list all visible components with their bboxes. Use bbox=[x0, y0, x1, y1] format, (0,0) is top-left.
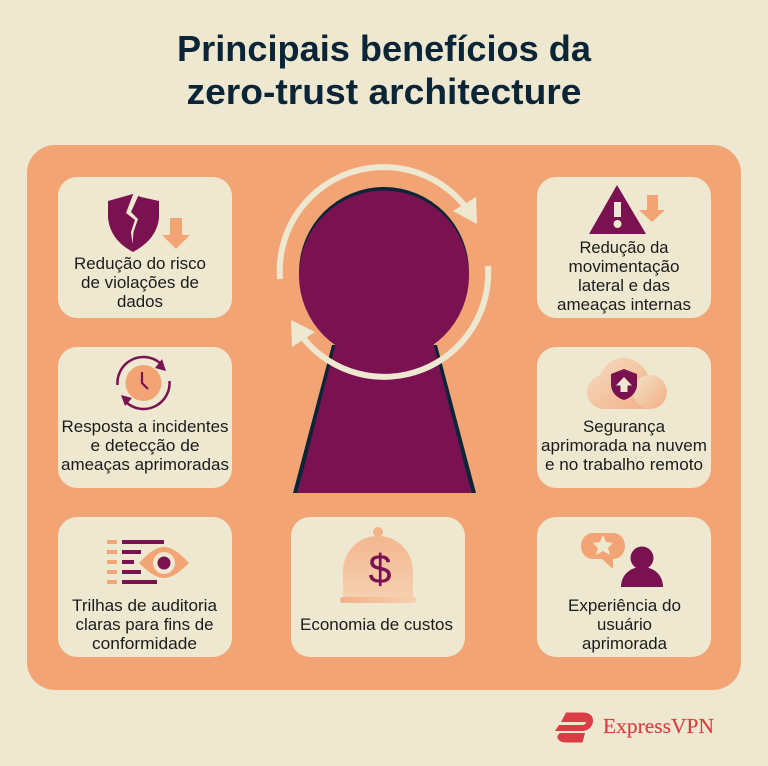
icon: warning triangle bbox=[589, 185, 646, 234]
ExpressVPN logo bbox=[555, 712, 714, 742]
icon: clock with arrows bbox=[117, 357, 170, 409]
card text: usuário bbox=[597, 616, 652, 634]
card text: aprimorada na nuvem bbox=[541, 437, 707, 455]
card text: Segurança bbox=[583, 418, 666, 436]
card text: Trilhas de auditoria bbox=[72, 597, 218, 615]
card: audit trails bbox=[58, 517, 232, 657]
icon: broken shield bbox=[108, 192, 159, 252]
card text bbox=[72, 597, 218, 653]
icon: eye with log lines bbox=[107, 540, 189, 584]
icon: down arrow bbox=[639, 195, 665, 222]
icon: cloud with shield bbox=[587, 358, 667, 409]
card: cloud security bbox=[537, 347, 711, 488]
card: data breach risk bbox=[58, 177, 232, 318]
card text: ameaças internas bbox=[557, 296, 691, 314]
card text: aprimorada bbox=[582, 635, 668, 653]
title: Principais benefícios da bbox=[177, 28, 592, 69]
panel: benefits bbox=[27, 145, 741, 690]
card text bbox=[557, 239, 691, 314]
card text: Redução do risco bbox=[74, 255, 206, 273]
card text: movimentação bbox=[568, 258, 680, 276]
card text: e no trabalho remoto bbox=[545, 456, 703, 474]
keyhole illustration bbox=[293, 187, 476, 493]
title: zero-trust architecture bbox=[186, 71, 582, 112]
title bbox=[177, 28, 592, 112]
icon: user with speech bubble bbox=[581, 533, 663, 587]
icon: down arrow bbox=[162, 218, 190, 249]
card text: conformidade bbox=[92, 635, 197, 653]
card text: de violações de bbox=[81, 274, 199, 292]
card text bbox=[541, 418, 707, 474]
card text: Experiência do bbox=[568, 597, 681, 615]
card text: dados bbox=[117, 293, 163, 311]
card text bbox=[61, 418, 229, 474]
card: user experience bbox=[537, 517, 711, 657]
circular arrows bbox=[280, 167, 488, 377]
card: cost savings bbox=[291, 517, 465, 657]
card text: Redução da bbox=[580, 239, 669, 257]
card text: Economia de custos bbox=[300, 616, 453, 634]
card text bbox=[568, 597, 681, 653]
card: incident response bbox=[58, 347, 232, 488]
card text: e detecção de bbox=[90, 437, 200, 455]
card text: claras para fins de bbox=[76, 616, 214, 634]
card text: lateral e das bbox=[578, 277, 670, 295]
logo wordmark: ExpressVPN bbox=[603, 714, 714, 738]
card: lateral movement bbox=[537, 177, 711, 318]
card text bbox=[74, 255, 206, 311]
icon: money bell bbox=[340, 527, 416, 603]
icon: money bell: $ bbox=[369, 546, 392, 592]
card text: ameaças aprimoradas bbox=[61, 456, 229, 474]
icon: logo mark bbox=[555, 712, 593, 742]
card text: Resposta a incidentes bbox=[62, 418, 228, 436]
